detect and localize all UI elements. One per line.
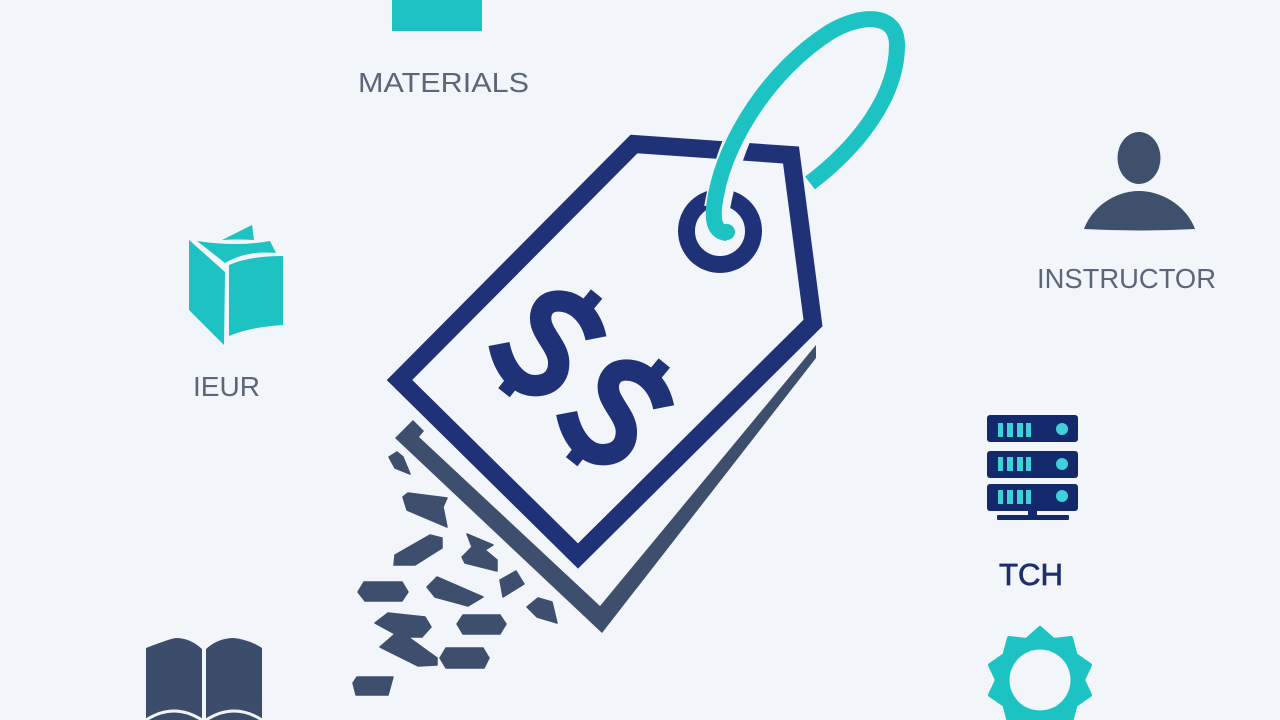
dollar signs — [499, 294, 664, 462]
price tag back layer — [395, 345, 816, 633]
icon: server stack — [987, 415, 1078, 520]
label: instructor: INSTRUCTOR — [1037, 263, 1216, 294]
icon: dark open book (cropped at bottom) — [146, 638, 262, 720]
tag eyelet ring — [686, 198, 754, 264]
icon: teal gear (cropped at bottom) — [990, 628, 1090, 720]
icon: materials box (cropped at top) — [392, 0, 482, 31]
dollar sign one — [499, 294, 597, 393]
price tag outline — [400, 144, 813, 556]
label: materials: MATERIALS — [358, 67, 529, 98]
label: tch: TCH — [999, 557, 1063, 592]
debris: crumbling tag fragments — [353, 452, 557, 695]
icon: teal open box book — [189, 225, 283, 345]
dollar sign two — [567, 363, 664, 462]
teal hanging loop — [714, 19, 897, 240]
label: ieur: IEUR — [193, 371, 260, 402]
icon: instructor person — [1084, 132, 1195, 230]
